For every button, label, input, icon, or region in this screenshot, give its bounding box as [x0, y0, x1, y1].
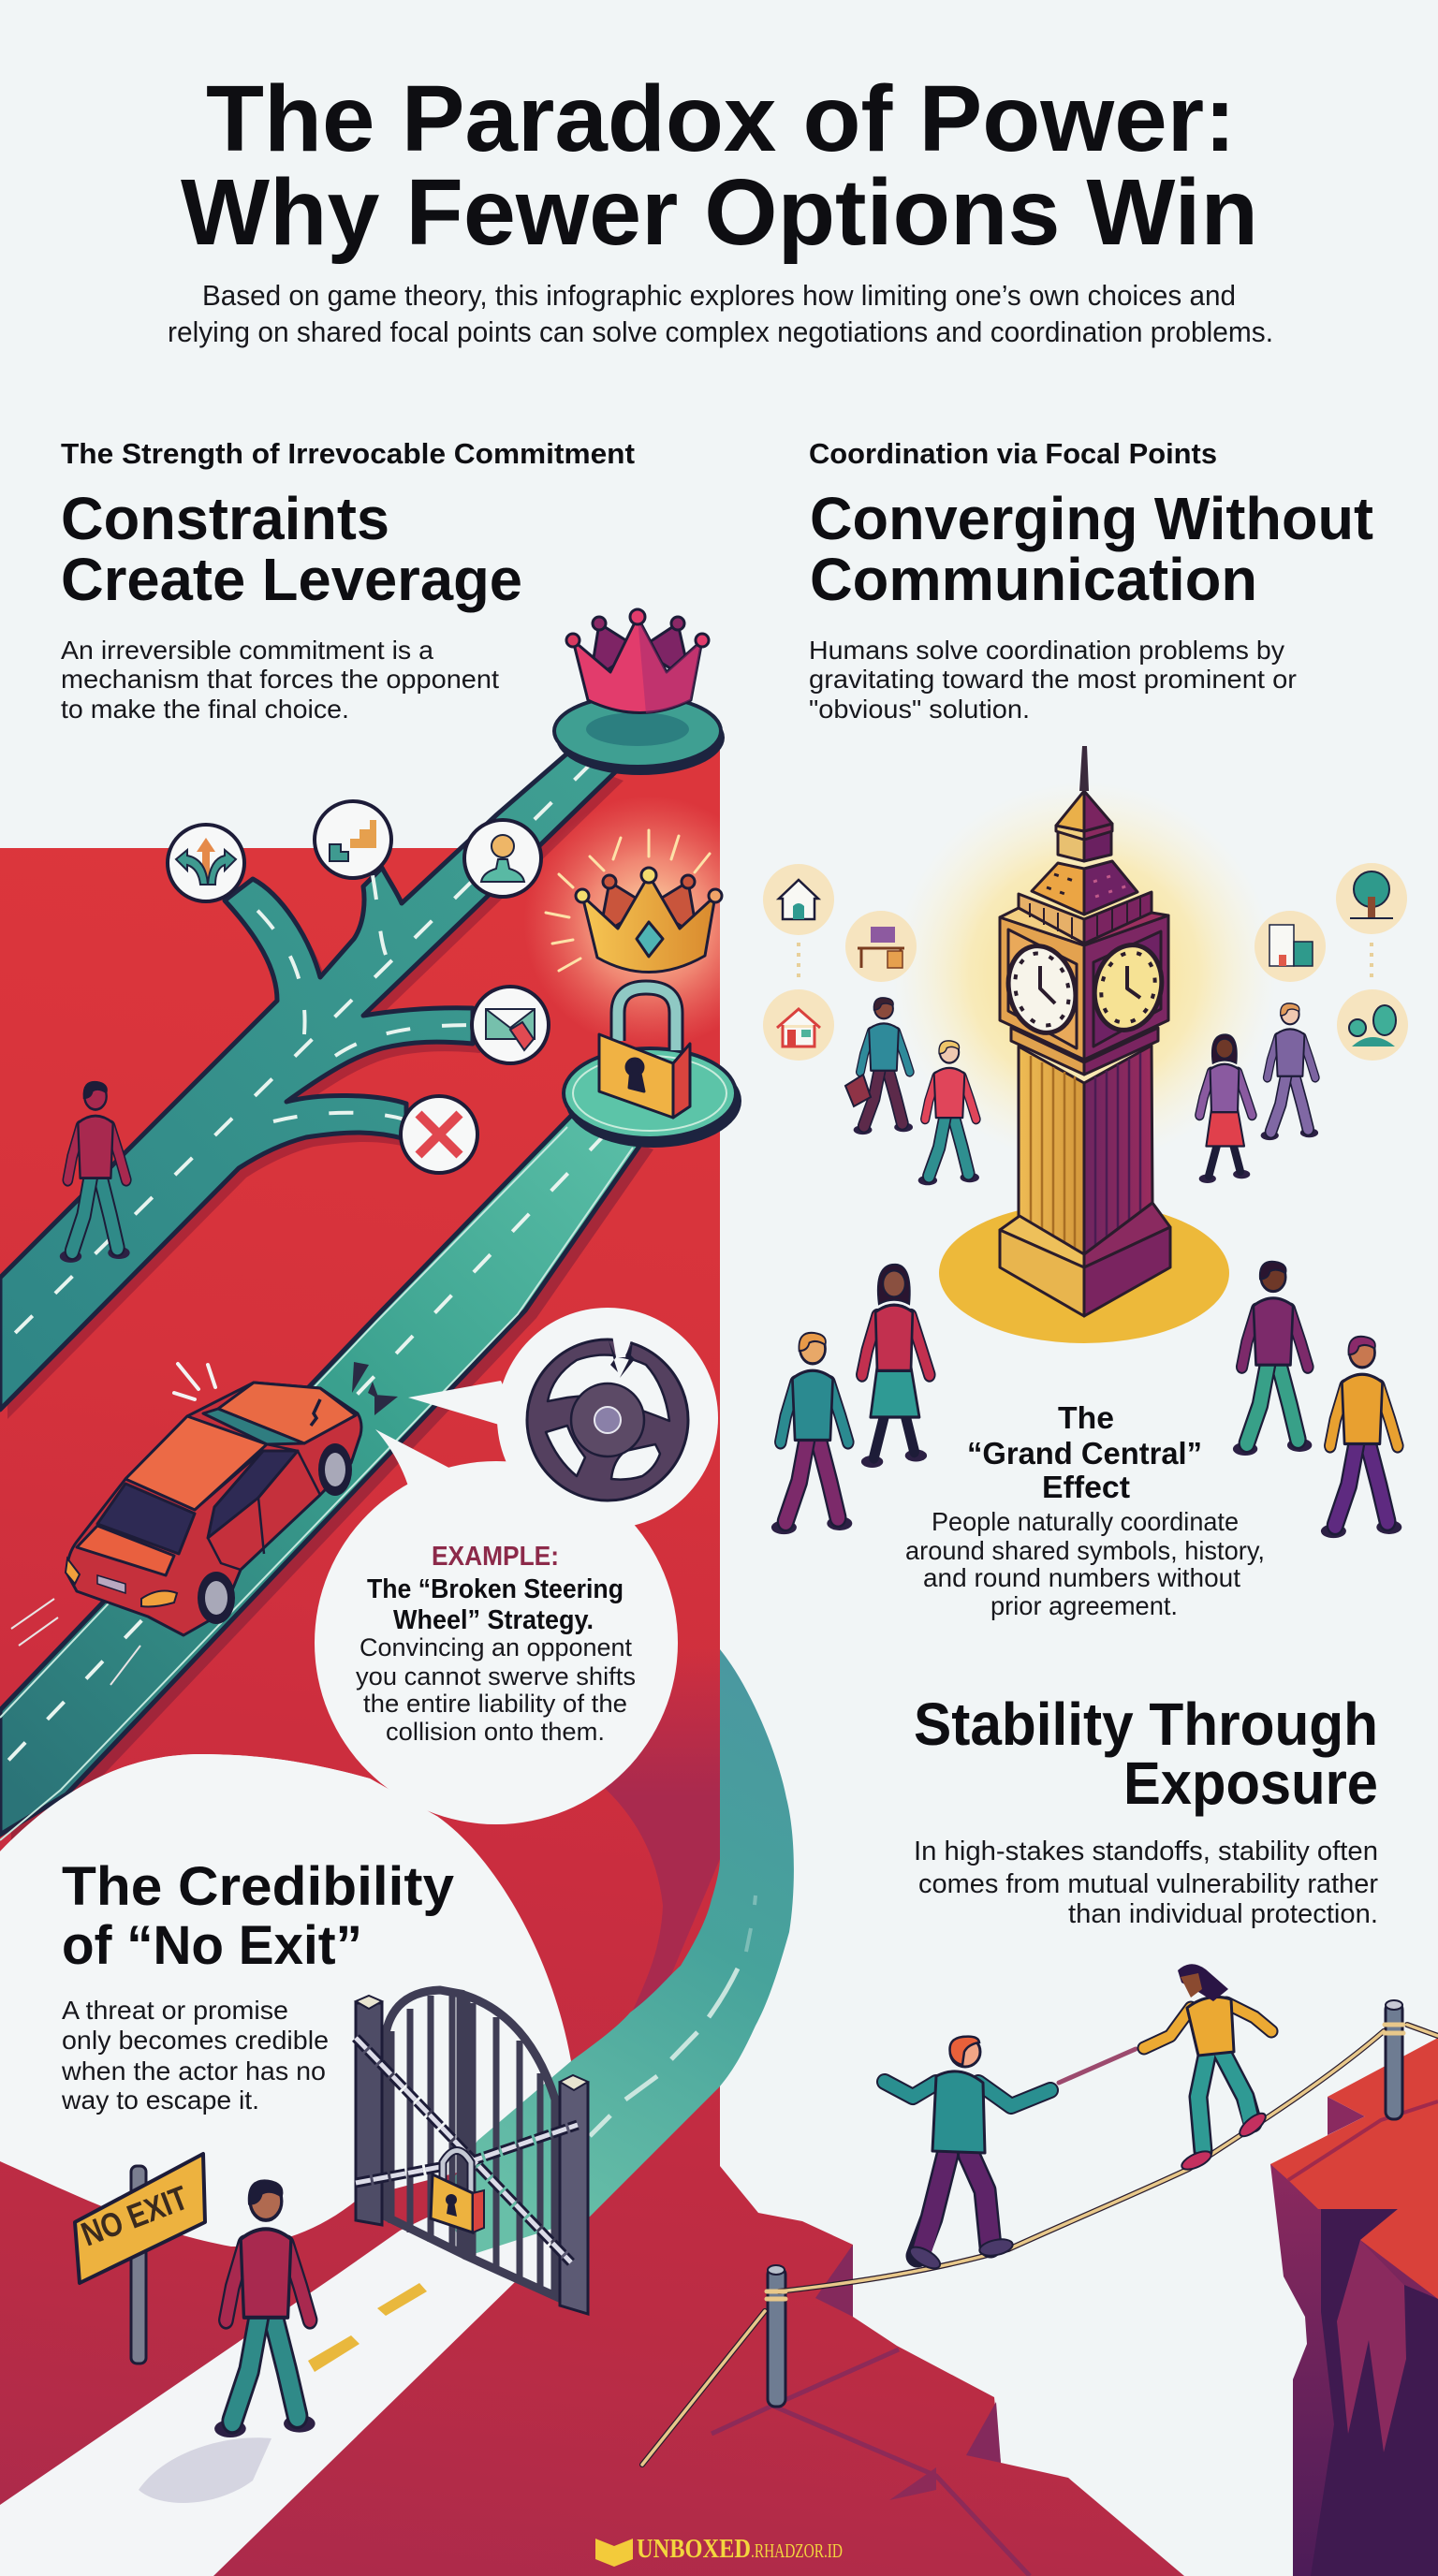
grand central text [905, 1400, 1265, 1620]
person crimson top [861, 1265, 930, 1468]
clock tower [1000, 746, 1170, 1316]
tightrope [642, 2025, 1438, 2465]
man on tightrope [885, 2037, 1050, 2273]
right coordination section: gravitating toward the most prominent or [809, 665, 1297, 694]
right coordination section: Communication [810, 546, 1257, 613]
icon: stairs [315, 801, 391, 878]
icon: gold crown [546, 830, 722, 973]
dark swoosh in red [599, 1647, 720, 2016]
example text: EXAMPLE: [432, 1542, 559, 1572]
example text: collision onto them. [386, 1718, 605, 1746]
grand central text: “Grand Central” [967, 1436, 1202, 1471]
credibility bubble top edge above road [0, 1754, 438, 1872]
crown pad [554, 695, 725, 775]
person mustard top [1321, 1337, 1401, 1538]
right coordination section [809, 437, 1373, 724]
right coordination section: "obvious" solution. [809, 695, 1030, 724]
locked gate [356, 1990, 588, 2314]
example text: you cannot swerve shifts [356, 1662, 636, 1690]
no exit sign: NO EXIT [76, 2178, 193, 2253]
person at gate shadow [139, 2437, 271, 2503]
subtitle: Based on game theory, this infographic explores how limiting one’s own choices and [202, 279, 1236, 312]
title: Why Fewer Options Win [181, 160, 1258, 265]
grand central text: People naturally coordinate [932, 1507, 1239, 1536]
yellow road dashes [308, 2283, 427, 2372]
golden glow [533, 805, 720, 1039]
example text: Convincing an opponent [360, 1633, 632, 1661]
text: credibility of no exit [61, 1856, 454, 2115]
person facing gate [214, 2181, 315, 2437]
clock tower plaza [939, 1203, 1229, 1343]
stability text: Exposure [1123, 1749, 1378, 1817]
no exit sign [75, 2154, 205, 2364]
person with red skirt [1199, 1034, 1252, 1183]
left commitment section: to make the final choice. [61, 695, 349, 724]
icon: tree right top [1336, 863, 1407, 934]
example text: Wheel” Strategy. [393, 1605, 594, 1635]
left commitment section: Constraints [61, 485, 389, 552]
grand central text: around shared symbols, history, [905, 1536, 1265, 1565]
stability text: In high-stakes standoffs, stability often [914, 1837, 1378, 1866]
example text: The “Broken Steering [367, 1574, 624, 1604]
left commitment section: mechanism that forces the opponent [61, 665, 499, 694]
icon: park right bottom [1337, 989, 1408, 1061]
stability text: comes from mutual vulnerability rather [918, 1869, 1378, 1899]
text: credibility of no exit: of “No Exit” [62, 1915, 362, 1976]
upper branching road [0, 695, 725, 1419]
title [181, 66, 1258, 265]
dotted link right [1370, 943, 1373, 981]
icon: home left top [763, 864, 834, 935]
stability text: Stability Through [914, 1690, 1378, 1758]
icon: broken steering wheel [527, 1335, 688, 1500]
text: credibility of no exit: when the actor has no [61, 2056, 326, 2086]
left cliff details [712, 2245, 1030, 2576]
stability text: than individual protection. [1068, 1899, 1378, 1929]
woman on tightrope [1144, 1964, 1271, 2174]
dotted link left [797, 943, 800, 981]
person with briefcase [845, 998, 913, 1134]
icon: envelope [472, 987, 549, 1063]
icon: red x [401, 1096, 477, 1173]
icon: desk [845, 911, 917, 982]
panel: example speech bubble [315, 1308, 718, 1824]
icon: fork arrows [168, 825, 244, 901]
title: The Paradox of Power: [206, 66, 1236, 171]
example text [356, 1542, 636, 1746]
icon: padlock [599, 988, 690, 1118]
lower road to padlock [0, 1048, 741, 1859]
text: credibility of no exit: way to escape it. [61, 2086, 259, 2115]
icon: person circle [464, 820, 541, 897]
stability text [914, 1690, 1378, 1929]
footer logo: UNBOXED [637, 2534, 751, 2564]
person teal sweater [771, 1333, 852, 1534]
post: left [768, 2265, 785, 2407]
left commitment section: The Strength of Irrevocable Commitment [61, 437, 635, 470]
text: credibility of no exit: A threat or promise [62, 1996, 288, 2025]
subtitle [168, 279, 1273, 348]
grand central text: prior agreement. [990, 1591, 1178, 1620]
left commitment section [61, 437, 635, 724]
left commitment section: Create Leverage [61, 546, 522, 613]
left commitment section: An irreversible commitment is a [61, 636, 433, 665]
person purple top [1233, 1262, 1312, 1456]
grand central text: and round numbers without [923, 1563, 1240, 1592]
footer logo: .RHADZOR.ID [751, 2539, 843, 2562]
padlock pad [564, 1048, 741, 1148]
person on branching road [60, 1082, 130, 1263]
example text: the entire liability of the [363, 1690, 627, 1718]
teal road behind gate [440, 1649, 794, 2256]
white road to gate [0, 2153, 562, 2576]
post: right [1386, 2000, 1402, 2119]
right coordination section: Converging Without [810, 485, 1373, 552]
right cliff [1270, 2038, 1438, 2576]
car on collision road [11, 1362, 398, 1685]
right coordination section: Humans solve coordination problems by [809, 636, 1284, 665]
text: credibility of no exit: only becomes credible [62, 2026, 329, 2055]
icon: home left bottom [763, 989, 834, 1061]
right coordination section: Coordination via Focal Points [809, 437, 1217, 470]
panel: credibility bubble [0, 1754, 571, 2247]
person in lavender suit [1261, 1003, 1318, 1140]
red cliff backdrop [0, 749, 1184, 2576]
grand central text: Effect [1042, 1470, 1130, 1504]
grand central text: The [1058, 1400, 1114, 1435]
subtitle: relying on shared focal points can solve complex negotiations and coordination problems. [168, 315, 1273, 348]
text: credibility of no exit: The Credibility [62, 1856, 454, 1917]
person in red top [918, 1041, 979, 1185]
icon: office buildings [1255, 911, 1326, 982]
clock tower glow [892, 782, 1276, 1165]
icon: pink crown [566, 609, 709, 713]
footer logo [595, 2534, 843, 2567]
